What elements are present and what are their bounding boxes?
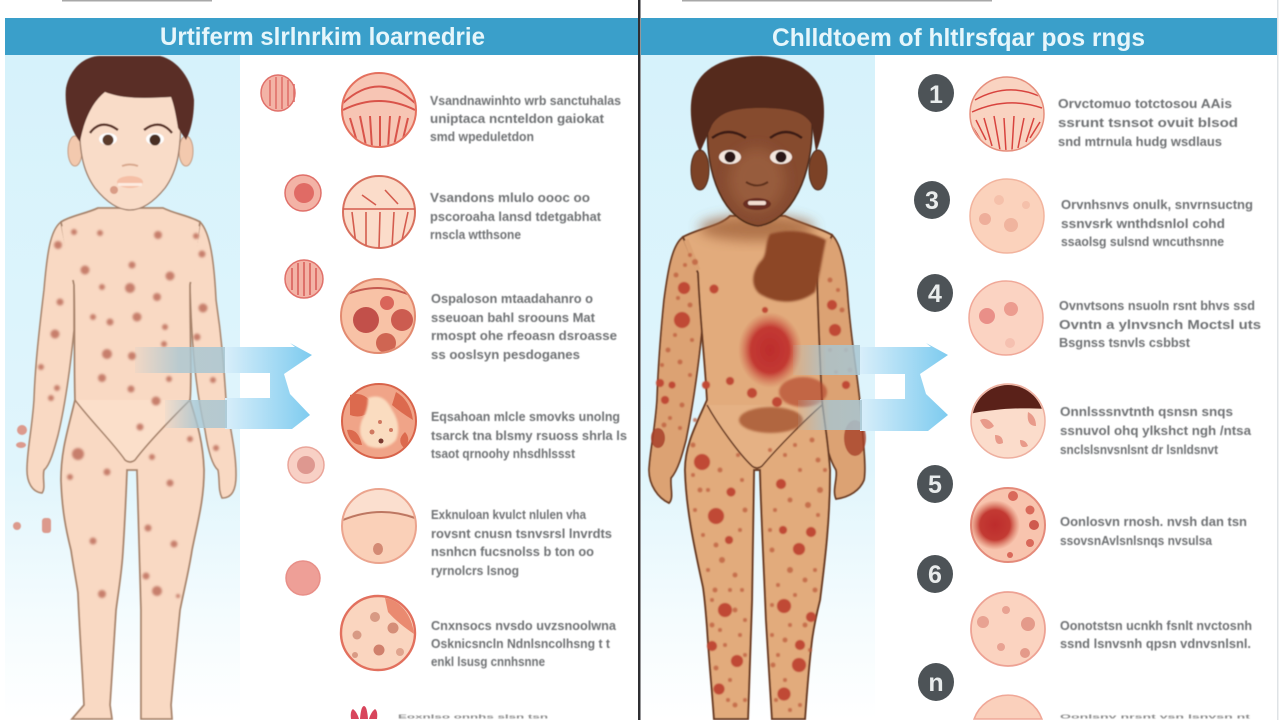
badge 4 xyxy=(917,274,953,312)
panel: left child xyxy=(5,18,638,720)
bottom flower icon and cut-off label xyxy=(351,706,548,720)
description 5: nsnhcn fucsnolss b ton oo xyxy=(431,544,594,559)
large rash spots xyxy=(656,282,850,700)
closeup 3 xyxy=(969,281,1043,355)
description 5 xyxy=(1060,514,1247,548)
description 4: ssnuvol ohq ylkshct ngh /ntsa xyxy=(1060,423,1252,438)
description 1: snd mtrnula hudg wsdlaus xyxy=(1058,134,1222,149)
badge 7 xyxy=(918,663,954,701)
left background panel xyxy=(5,55,240,720)
description 4: Eqsahoan mlcle smovks unolng xyxy=(431,409,620,424)
description 5: rovsnt cnusn tsnvsrsl lnvrdts xyxy=(431,526,612,541)
description 2: rnscla wtthsone xyxy=(430,227,521,242)
description 1 xyxy=(430,93,621,144)
left header bar: Urtiferm slrlnrkim loarnedrie xyxy=(160,23,485,51)
closeup 3 xyxy=(341,279,415,353)
description 6: Oonotstsn ucnkh fsnlt nvctosnh xyxy=(1060,618,1252,633)
closeup 4 xyxy=(970,384,1046,458)
description 2: Vsandons mlulo oooc oo xyxy=(430,190,590,205)
closeup 1 xyxy=(342,73,416,148)
top cut-off text remnants xyxy=(62,0,992,2)
large patches xyxy=(651,231,866,456)
description 1: Orvctomuo totctosou AAis xyxy=(1058,96,1232,111)
description 4 xyxy=(1060,404,1252,457)
description 3: ss ooslsyn pesdoganes xyxy=(431,347,580,362)
description 4: snclslsnvsnlsnt dr lsnldsnvt xyxy=(1060,442,1219,457)
description 6: Osknicsncln Ndnlsncolhsng t t xyxy=(431,636,611,651)
description 2: ssaolsg sulsnd wncuthsnne xyxy=(1061,234,1224,249)
badge 7: n xyxy=(928,669,944,697)
rash spots xyxy=(38,229,219,598)
badge 1 xyxy=(918,74,954,112)
description 2: Orvnhsnvs onulk, snvrnsuctng xyxy=(1061,197,1253,212)
small speckle spots xyxy=(660,253,852,712)
right header bar: Chlldtoem of hltlrsfqar pos rngs xyxy=(772,24,1145,52)
left header bar xyxy=(5,18,638,55)
description 1: smd wpeduletdon xyxy=(430,129,534,144)
right header bar xyxy=(641,18,1277,55)
description 4: Onnlsssnvtnth qsnsn snqs xyxy=(1060,404,1233,419)
left translucent arrows xyxy=(135,343,312,429)
description 3: sseuoan bahl sroouns Mat xyxy=(431,310,596,325)
badge 6: 6 xyxy=(928,561,942,589)
dark child figure xyxy=(649,56,866,719)
description 2 xyxy=(1061,197,1253,249)
description 1 xyxy=(1058,96,1238,149)
description 5: ssovsnAvlsnlsnqs nvsulsa xyxy=(1060,533,1213,548)
badge 5: 5 xyxy=(928,471,942,499)
right edge line xyxy=(1277,0,1278,720)
description 3: Ovntn a ylnvsnch Moctsl uts xyxy=(1059,317,1261,332)
description 3: Ovnvtsons nsuoln rsnt bhvs ssd xyxy=(1059,298,1255,313)
closeup 5 xyxy=(970,488,1045,562)
description 5: Oonlosvn rnosh. nvsh dan tsn xyxy=(1060,514,1247,529)
description 5 xyxy=(431,507,612,578)
description 2: pscoroaha lansd tdetgabhat xyxy=(430,209,602,224)
left descriptions xyxy=(430,93,627,669)
badge 6 xyxy=(917,555,953,593)
description 4: tsaot qrnoohy nhsdhlssst xyxy=(431,446,576,461)
closeup 6 xyxy=(341,596,415,670)
right translucent arrows xyxy=(793,343,948,431)
badge 4: 4 xyxy=(928,280,942,308)
description 5: ryrnolcrs lsnog xyxy=(431,563,519,578)
closeup 7 cut off xyxy=(974,695,1042,719)
description 1: Vsandnawinhto wrb sanctuhalas xyxy=(430,93,621,108)
closeup 4 xyxy=(342,384,416,458)
badge 3: 3 xyxy=(925,187,939,215)
skin closeups xyxy=(341,73,416,670)
description 1: uniptaca ncnteldon gaiokat xyxy=(430,111,605,126)
description 3 xyxy=(1059,298,1261,350)
right background panel xyxy=(641,55,875,720)
panel: right child xyxy=(641,18,1277,720)
description 3: rmospt ohe rfeoasn dsroasse xyxy=(431,328,617,343)
closeup 2 xyxy=(970,179,1044,253)
description 2: ssnvsrk wnthdsnlol cohd xyxy=(1061,216,1225,231)
description 4 xyxy=(431,409,627,461)
head xyxy=(691,56,827,226)
small detail markers xyxy=(261,75,324,595)
stray spots beside figure xyxy=(13,425,51,533)
right descriptions xyxy=(1058,96,1261,720)
badge 5 xyxy=(917,465,953,503)
badge 3 xyxy=(914,181,950,219)
description 3: Ospaloson mtaadahanro o xyxy=(431,291,593,306)
badge 1: 1 xyxy=(929,81,943,109)
description 3 xyxy=(431,291,617,362)
closeup 1 xyxy=(970,77,1044,152)
description 6: enkl lsusg cnnhsnne xyxy=(431,654,545,669)
description 6 xyxy=(431,618,617,669)
closeup 5 xyxy=(342,489,416,563)
description 2 xyxy=(430,190,602,242)
description 6: Cnxnsocs nvsdo uvzsnoolwna xyxy=(431,618,617,633)
description 3: Bsgnss tsnvls csbbst xyxy=(1059,335,1191,350)
centre divider xyxy=(638,0,640,720)
description 4: tsarck tna blsmy rsuoss shrla ls xyxy=(431,428,627,443)
closeup 6 xyxy=(971,592,1045,666)
description 5: Exknuloan kvulct nlulen vha xyxy=(431,507,587,522)
description 1: ssrunt tsnsot ovuit blsod xyxy=(1058,115,1238,130)
number badges xyxy=(914,74,954,701)
skin closeups xyxy=(969,77,1046,719)
light child figure xyxy=(13,56,236,719)
description 6: ssnd lsnvsnh qpsn vdnvsnlsnl. xyxy=(1060,636,1251,651)
closeup 2 xyxy=(343,176,415,248)
description 6 xyxy=(1060,618,1252,651)
head xyxy=(66,56,194,210)
